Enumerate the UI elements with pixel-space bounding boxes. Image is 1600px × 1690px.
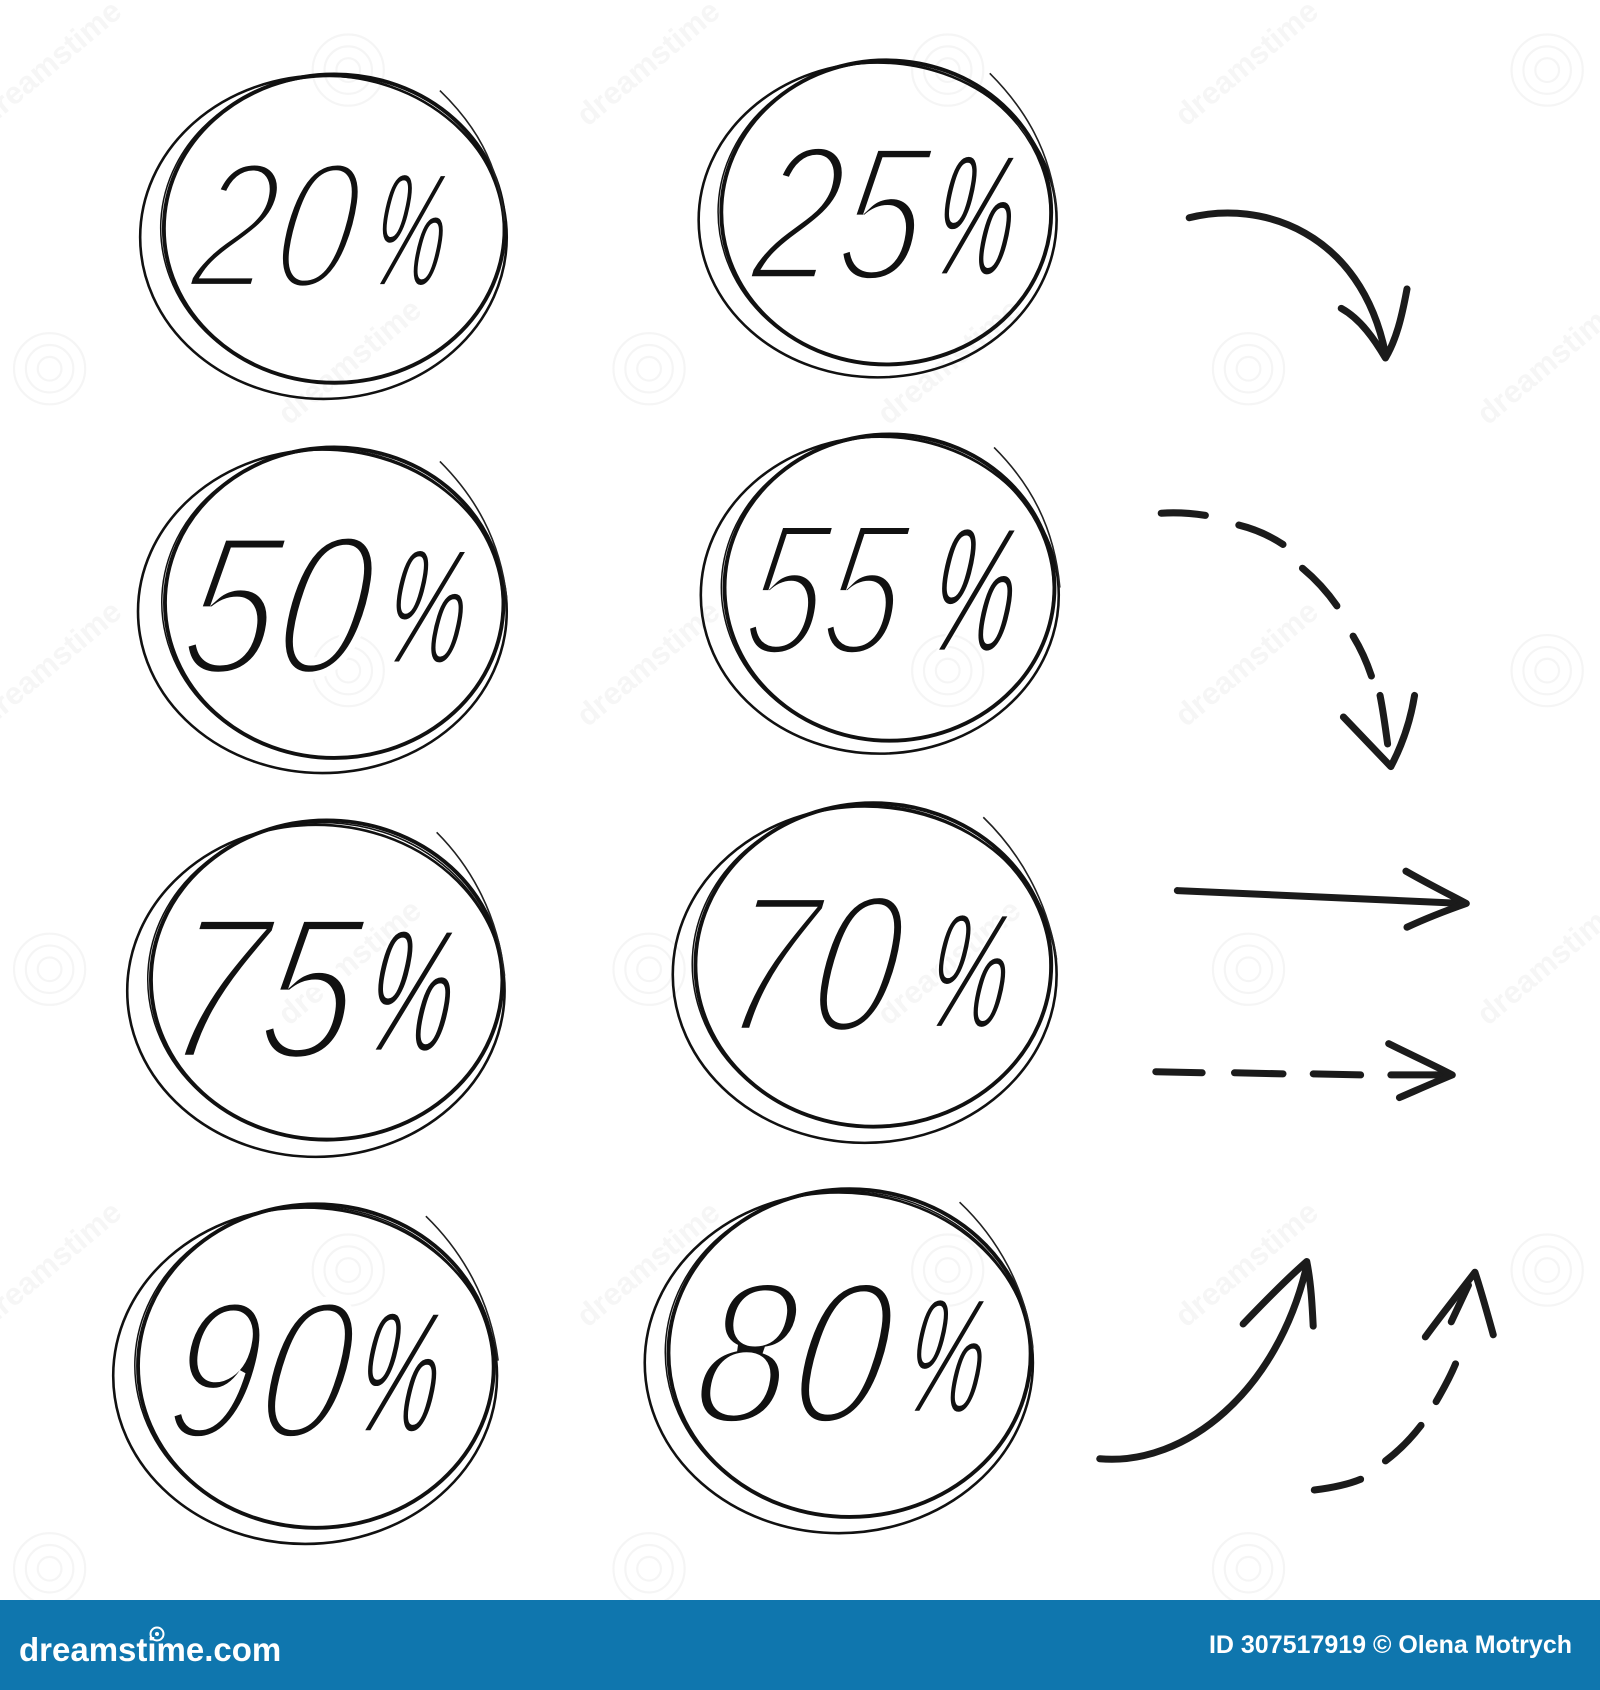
label: 20%: %: [363, 140, 460, 321]
arrow: solid straight right: [1177, 871, 1466, 927]
label: 80%: 80: [683, 1240, 907, 1467]
watermark pattern: dreamstime: [271, 292, 428, 431]
watermark pattern: dreamstime: [870, 292, 1027, 431]
circle: 55%: [701, 428, 1061, 754]
label: 75%: %: [356, 894, 470, 1089]
circle: 70%: [673, 796, 1058, 1143]
arrow: dashed curved down: [1161, 513, 1415, 767]
arrow: dashed curved up: [1314, 1272, 1493, 1490]
watermark pattern: dreamstime: [1168, 1194, 1325, 1334]
arrow: solid curved up: [1100, 1261, 1313, 1459]
label: 20%: 20: [181, 124, 372, 327]
image credit: ID 307517919 © Olena Motrych: [1209, 1631, 1572, 1659]
footer bar: [0, 1600, 1600, 1690]
label: 70%: 70: [712, 855, 917, 1075]
watermark pattern: dreamstime: [271, 892, 428, 1032]
circle: 25%: [699, 54, 1058, 377]
label: 70%: %: [918, 879, 1024, 1062]
label: 90%: %: [346, 1276, 455, 1469]
label: 50%: 50: [171, 495, 387, 717]
label: 25%: %: [923, 119, 1030, 312]
circle: 90%: [113, 1197, 501, 1544]
label: 90%: 90: [156, 1261, 368, 1481]
icon: logo spiral: [150, 1626, 164, 1642]
label: 75%: 75: [153, 874, 375, 1103]
arrow: dashed straight right: [1156, 1044, 1452, 1098]
label: 55%: %: [920, 490, 1032, 689]
circle: 80%: [645, 1182, 1038, 1533]
circle: 20%: [140, 68, 511, 399]
arrow: solid curved down: [1189, 213, 1407, 358]
watermark pattern: dreamstime: [1168, 594, 1325, 733]
label: 80%: %: [896, 1264, 1000, 1447]
label: 55%: 55: [734, 483, 920, 695]
circle: 75%: [127, 814, 509, 1157]
circle: 50%: [138, 441, 510, 773]
label: 25%: 25: [741, 105, 941, 322]
watermark pattern: dreamstime: [870, 892, 1027, 1032]
label: 50%: %: [376, 515, 481, 698]
watermark pattern: dreamstime: [570, 594, 726, 733]
logo: dreamstime.com: dreamstime.com: [19, 1631, 281, 1668]
watermark pattern: dreamstime: [570, 1194, 726, 1334]
